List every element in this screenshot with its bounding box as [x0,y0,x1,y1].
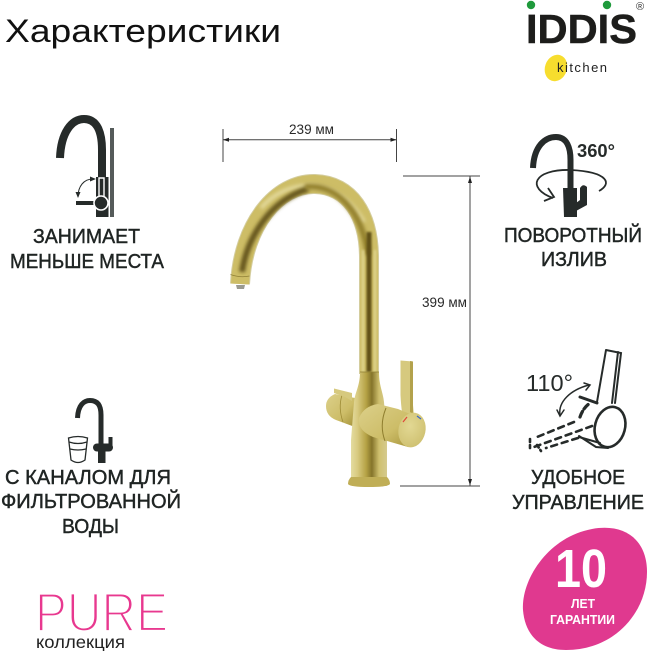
dimension: width 239 mm [223,121,396,162]
badge: 10 year warranty [523,528,647,650]
badge: 10 year warranty: ГАРАНТИИ [550,613,615,627]
label: filtered water channel: ВОДЫ [62,516,119,538]
label: swivel spout: ПОВОРОТНЫЙ [504,223,642,247]
badge: 10 year warranty: 10 [555,539,607,599]
dimension: height 399 mm [400,176,480,486]
faucet base [348,477,390,487]
logo: IDDIS kitchen: ® [636,1,644,13]
label: filtered water channel: С КАНАЛОМ ДЛЯ [5,467,171,489]
label: saves space: МЕНЬШЕ МЕСТА [10,251,165,273]
label: saves space [10,226,165,273]
label: easy control: УДОБНОЕ [531,467,625,489]
label: swivel spout: ИЗЛИВ [541,249,607,271]
label: filtered water channel: ФИЛЬТРОВАННОЙ [1,489,181,513]
collection name: PURE [35,581,168,643]
label: saves space: ЗАНИМАЕТ [33,226,140,248]
icon: 360 degree swivel [533,137,615,217]
label: easy control: УПРАВЛЕНИЕ [512,492,644,514]
right lever [400,360,414,416]
text: 110 degrees: 110° [526,370,573,396]
faucet spout and tube [240,184,375,374]
label: swivel spout [504,223,642,271]
faucet photo [230,184,429,487]
icon: 360 degree swivel: 360° [577,141,615,161]
handle cap [395,410,429,450]
icon: 110 degree lever [530,350,630,451]
logo: IDDIS kitchen [526,1,644,84]
label: filtered water channel [1,467,181,538]
badge: 10 year warranty: ЛЕТ [571,597,595,611]
label: easy control [512,467,644,514]
logo: IDDIS kitchen: kitchen [557,60,607,75]
logo: IDDIS kitchen: IDDIS [526,6,637,52]
right cylinder [359,404,415,447]
dimension: height 399 mm: 399 мм [422,294,467,310]
icon: filtered water faucet and glass [68,400,113,463]
icon: compact faucet near wall [60,119,114,217]
faucet body [351,372,387,480]
title: Характеристики [5,13,281,49]
dimension: width 239 mm: 239 мм [289,121,334,137]
left handle [326,388,355,427]
spout tip [230,274,250,277]
